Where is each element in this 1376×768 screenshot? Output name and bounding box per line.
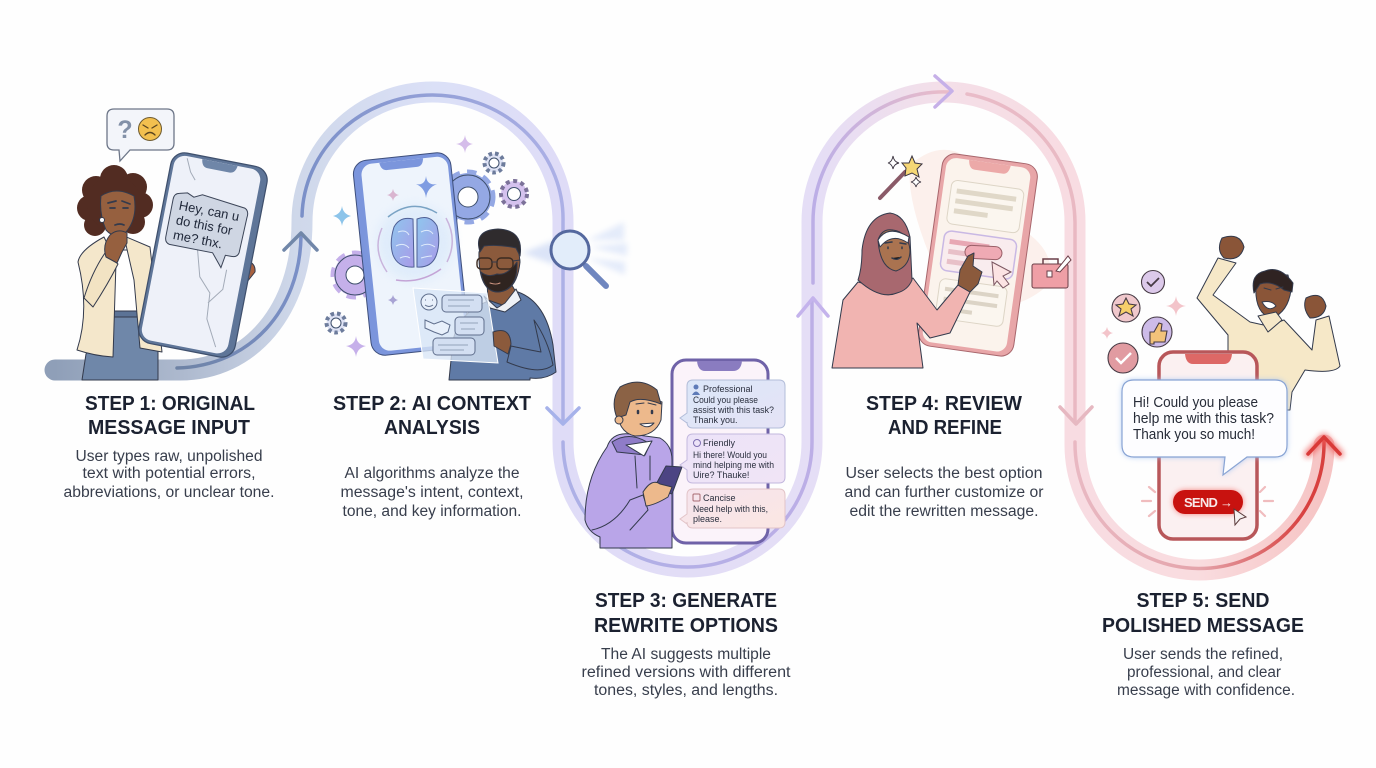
description: step 2: tone, and key information. [342,503,522,520]
step 3 illustration: man with rewrite options [585,360,785,548]
heading: step 1: MESSAGE INPUT [88,416,250,439]
celebrating man [1197,236,1340,410]
description: step 3: The AI suggests multiple [601,646,771,663]
icon: toolbox [1032,256,1071,288]
heading: step 2: ANALYSIS [384,416,480,439]
description: step 5: message with confidence. [1117,682,1295,699]
step 2 text block [333,392,531,520]
icon: confused speech bubble [107,109,174,161]
options phone [672,360,768,543]
polished message bubble: Thank you so much! [1133,427,1255,443]
soft pink background blob [910,150,1051,307]
description: step 1: text with potential errors, [82,465,256,482]
step 4 illustration: woman refining message [832,150,1071,368]
description: step 2: message's intent, context, [340,484,524,501]
icon: gears [326,154,527,332]
heading: step 5: STEP 5: SEND [1136,589,1270,612]
card: friendly: Uire? Thauke! [693,470,749,480]
AI phone with brain [352,151,470,357]
heading: step 4: AND REFINE [888,416,1002,439]
flow ribbon connecting all steps [55,76,1324,570]
heading: step 1: STEP 1: ORIGINAL [85,392,255,415]
description: step 1 [64,448,274,501]
icon: cursor arrow [992,262,1011,288]
highlighted pink button [965,245,1002,260]
polished message bubble [1122,380,1287,475]
cracked phone with rough message: Hey, can u [178,198,241,224]
description: step 1: User types raw, unpolished [76,448,262,465]
description: step 3: refined versions with different [582,664,791,681]
cracked phone with rough message: do this for [175,212,234,238]
flow line: all step connectors [177,76,1324,569]
badge icons [1101,270,1186,373]
man's hand and sleeve [493,320,553,370]
heading: step 5 [1102,589,1304,637]
icon: sparkles [333,135,473,357]
card: concise: please. [693,514,722,524]
step 2 illustration: AI brain analysis [326,135,627,380]
card: friendly: mind helping me with [693,460,774,470]
description: step 4: edit the rewritten message. [850,503,1038,520]
description: step 4 [844,465,1044,520]
send button with glow [1142,487,1273,525]
description: step 5: professional, and clear [1127,664,1281,681]
send button with glow: SEND → [1184,495,1233,510]
holographic chat panel [413,288,498,363]
card: professional: assist with this task? [693,405,774,415]
card: concise [680,489,785,528]
description: step 5 [1117,646,1295,699]
step 4 text block [844,392,1044,520]
polished message bubble: Hi! Could you please [1133,395,1258,411]
small phone and hand [643,466,682,506]
woman figure [77,165,255,380]
icon: magic wand [880,156,922,198]
description: step 4: and can further customize or [844,484,1044,501]
card: concise: Need help with this, [693,504,768,514]
send phone [1159,352,1257,539]
step 1 text block [64,392,274,501]
description: step 4: User selects the best option [846,465,1042,482]
card: professional: Could you please [693,395,758,405]
glowing red arrow head [1308,437,1340,454]
card: friendly: Hi there! Would you [693,450,767,460]
step 3 text block [582,589,791,699]
man in purple hoodie [585,382,672,548]
cracked phone with rough message: me? thx. [172,227,224,251]
card: professional: Thank you. [693,415,738,425]
card: friendly [680,434,785,483]
refine phone [917,152,1039,358]
heading: step 5: POLISHED MESSAGE [1102,614,1304,637]
icon: magnifying glass with beams [522,222,627,286]
icon: confused speech bubble: ? [117,116,133,144]
heading: step 1 [85,392,255,439]
description: step 3 [582,646,791,699]
heading: step 2: STEP 2: AI CONTEXT [333,392,531,415]
cracked phone with rough message [136,150,270,360]
heading: step 4 [866,392,1023,439]
man in sweater [449,229,556,380]
heading: step 2 [333,392,531,439]
step 1 illustration: woman with cracked phone [77,109,270,380]
description: step 5: User sends the refined, [1123,646,1283,663]
heading: step 3 [594,589,778,637]
heading: step 4: STEP 4: REVIEW [866,392,1023,415]
description: step 2: AI algorithms analyze the [344,465,520,482]
card: friendly: Friendly [703,438,736,448]
card: professional [680,380,785,428]
polished message bubble: help me with this task? [1133,411,1274,427]
step 5 illustration: celebrating man sending message [1101,236,1340,539]
heading: step 3: REWRITE OPTIONS [594,614,778,637]
card: concise: Cancise [703,493,736,503]
description: step 3: tones, styles, and lengths. [594,682,778,699]
description: step 2 [340,465,524,520]
woman in hijab [832,213,982,368]
card: professional: Professional [703,384,753,394]
icon: brain [391,218,439,267]
step 5 text block [1102,589,1304,699]
description: step 1: abbreviations, or unclear tone. [64,484,274,501]
heading: step 3: STEP 3: GENERATE [595,589,777,612]
